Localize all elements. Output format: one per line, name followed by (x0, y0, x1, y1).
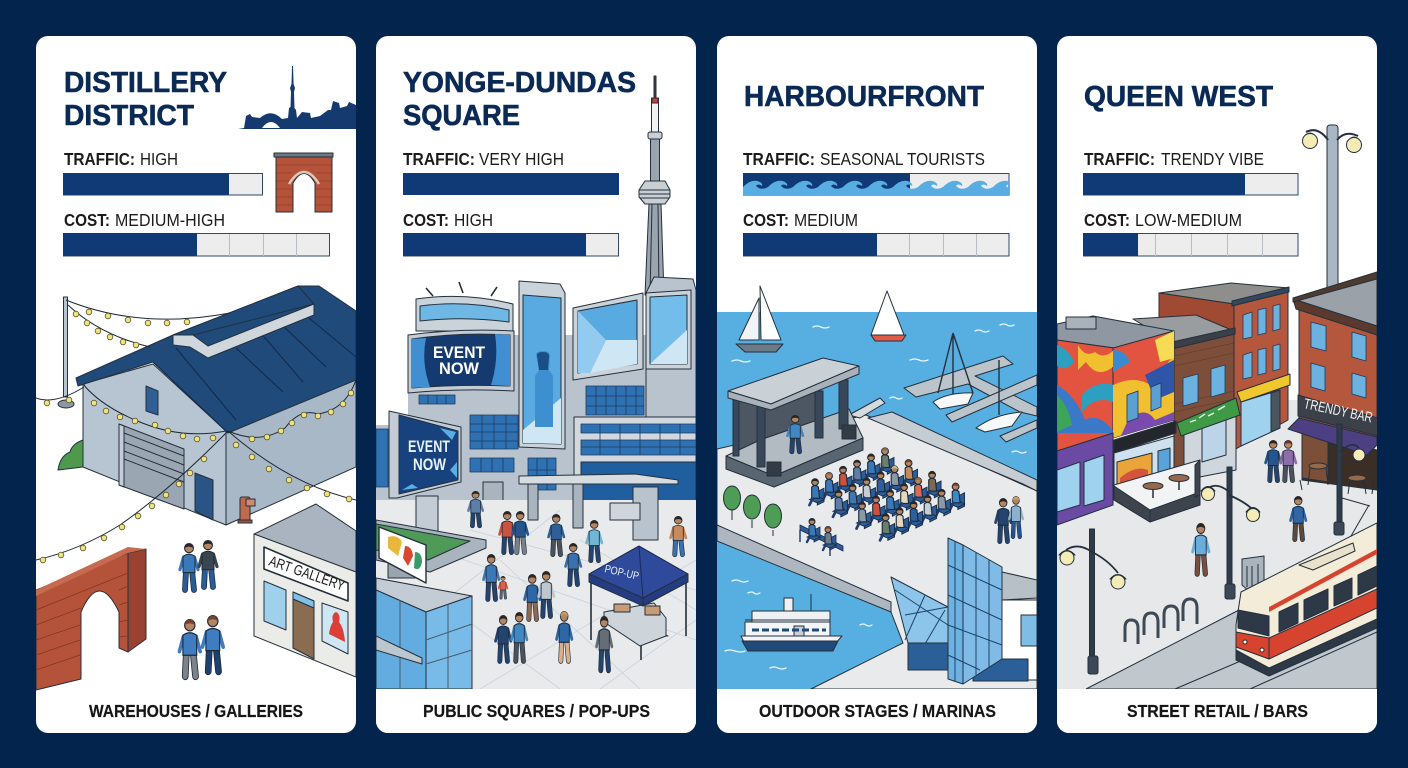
cost meter: HIGH (454, 210, 493, 230)
purple awning (1288, 418, 1377, 455)
traffic meter (63, 149, 262, 195)
heading: Yonge-Dundas Square (403, 67, 636, 132)
cost meter (63, 210, 330, 256)
hydrant (238, 497, 255, 523)
sailboat 3 (938, 333, 973, 395)
overhead wire (1340, 498, 1370, 555)
performer (788, 415, 803, 452)
green planter (376, 520, 486, 572)
footer caption: OUTDOOR STAGES / MARINAS (759, 701, 996, 721)
traffic meter: VERY HIGH (479, 149, 564, 169)
footer strip (1057, 689, 1377, 733)
illustration: Yonge-Dundas buildings (376, 277, 696, 505)
heading: Harbourfront: HARBOURFRONT (744, 81, 984, 113)
mural building (1057, 316, 1174, 451)
red sculpture (329, 612, 345, 642)
warehouse walls (83, 364, 226, 525)
bar sign (1298, 395, 1378, 436)
heading: Queen West: QUEEN WEST (1084, 81, 1273, 113)
corner building (376, 578, 472, 689)
trendy bar building (1288, 272, 1378, 490)
lamp posts (1059, 424, 1365, 674)
billboard text top: EVENT (433, 343, 486, 362)
sailboat 1 (760, 286, 781, 340)
water (717, 312, 1037, 689)
patio fence with tables (1114, 460, 1200, 522)
brick wall arch (36, 547, 146, 690)
tent text: POP-UP (603, 563, 640, 583)
footer caption: PUBLIC SQUARES / POP-UPS (423, 701, 650, 721)
logo sign (379, 527, 426, 583)
panel: Harbourfront (717, 36, 1037, 733)
audience seating (809, 448, 965, 540)
antennae (426, 282, 497, 296)
right wing bands (574, 416, 696, 475)
walking people (179, 541, 223, 676)
trash bin (1242, 556, 1264, 591)
door (195, 473, 213, 520)
footer caption: STREET RETAIL / BARS (1127, 701, 1308, 721)
streetcar (1236, 523, 1377, 676)
ferry (741, 594, 842, 651)
sailboat 2 (871, 291, 904, 335)
tall street lamp (1302, 125, 1362, 290)
gallery sign text: ART GALLERY (267, 554, 347, 595)
heading: Yonge-Dundas Square: YONGE-DUNDAS (403, 67, 636, 99)
windows (264, 581, 286, 630)
light pole (58, 297, 74, 408)
purple shop and cafe front (1057, 421, 1176, 525)
sailboats (736, 286, 1022, 432)
billboard text top: NOW (439, 359, 480, 378)
panel: Distillery District (36, 36, 356, 733)
cost meter (403, 210, 618, 256)
illustration: warehouse (76, 286, 356, 525)
far right screen (646, 290, 691, 369)
land (717, 398, 1037, 689)
bike racks (1125, 599, 1197, 644)
window (146, 386, 158, 415)
cost meter (1083, 210, 1298, 256)
panel: Queen West (1057, 36, 1378, 733)
window grids (586, 386, 644, 415)
cost meter: COST: (64, 210, 110, 230)
billboard: event now street (389, 411, 461, 550)
billboard text: EVENT (408, 437, 450, 456)
heading: Distillery District: DISTILLERY (64, 67, 227, 99)
cost meter (743, 210, 1009, 256)
heading: Distillery District: DISTRICT (64, 100, 194, 132)
panel: Yonge-Dundas Square (376, 36, 696, 733)
footer caption: WAREHOUSES / GALLERIES (89, 701, 303, 721)
cost meter: LOW-MEDIUM (1135, 210, 1242, 230)
heading: Distillery District (66, 72, 227, 126)
canopy (519, 474, 678, 540)
cost meter: COST: (1084, 210, 1130, 230)
traffic meter with waves: SEASONAL TOURISTS (820, 149, 985, 169)
art gallery building (254, 504, 356, 677)
upper sign box (416, 296, 513, 331)
mural art (1057, 331, 1174, 438)
bottle shape on screen (535, 351, 553, 427)
billboard: event now top (408, 330, 514, 393)
outdoor stage (726, 358, 863, 487)
traffic meter with waves: TRAFFIC: (743, 149, 815, 169)
roof (76, 286, 356, 433)
plaza people (468, 491, 688, 670)
billboard text (408, 437, 450, 474)
cost meter: COST: (743, 210, 789, 230)
cost meter: MEDIUM-HIGH (115, 210, 225, 230)
traffic meter: TRENDY VIBE (1161, 149, 1264, 169)
pop-up tent (589, 546, 688, 660)
traffic meter with waves (743, 149, 1018, 196)
traffic meter: TRAFFIC: (1084, 149, 1155, 169)
heading: Yonge-Dundas Square: SQUARE (403, 100, 520, 132)
footer strip (376, 689, 696, 733)
roof monitor (173, 286, 314, 335)
glass pavilion (891, 538, 1037, 684)
wave marks (725, 324, 1026, 669)
gallery sign (264, 547, 348, 601)
traffic meter (403, 149, 619, 195)
patio tables (1300, 463, 1374, 494)
bush (58, 440, 83, 470)
bench with people (800, 518, 843, 556)
street people (1193, 440, 1306, 574)
traffic meter: TRAFFIC: (403, 149, 475, 169)
traffic meter: TRAFFIC: (64, 149, 135, 169)
billboard text top (433, 343, 486, 378)
tall screen (519, 281, 565, 449)
red brick building (1159, 283, 1290, 450)
bar sign text: TRENDY BAR (1302, 396, 1374, 426)
footer strip (717, 689, 1037, 733)
icon: Toronto skyline (238, 66, 356, 129)
billboard text: NOW (413, 455, 447, 474)
icon: brick arch (274, 153, 333, 212)
trees (724, 486, 782, 536)
ground and road (1057, 400, 1377, 689)
standing visitors (996, 496, 1023, 541)
cost meter: MEDIUM (794, 210, 858, 230)
marina docks (904, 356, 1037, 442)
traffic meter (1083, 149, 1298, 195)
sailboat 4 (998, 360, 1000, 415)
icon: CN Tower (639, 76, 670, 295)
plaza (376, 500, 696, 689)
traffic meter: HIGH (140, 149, 178, 169)
cost meter: COST: (403, 210, 449, 230)
garage door (119, 424, 184, 509)
brown shop building (1133, 315, 1240, 480)
string lights (36, 300, 356, 563)
right billboard (573, 293, 643, 380)
